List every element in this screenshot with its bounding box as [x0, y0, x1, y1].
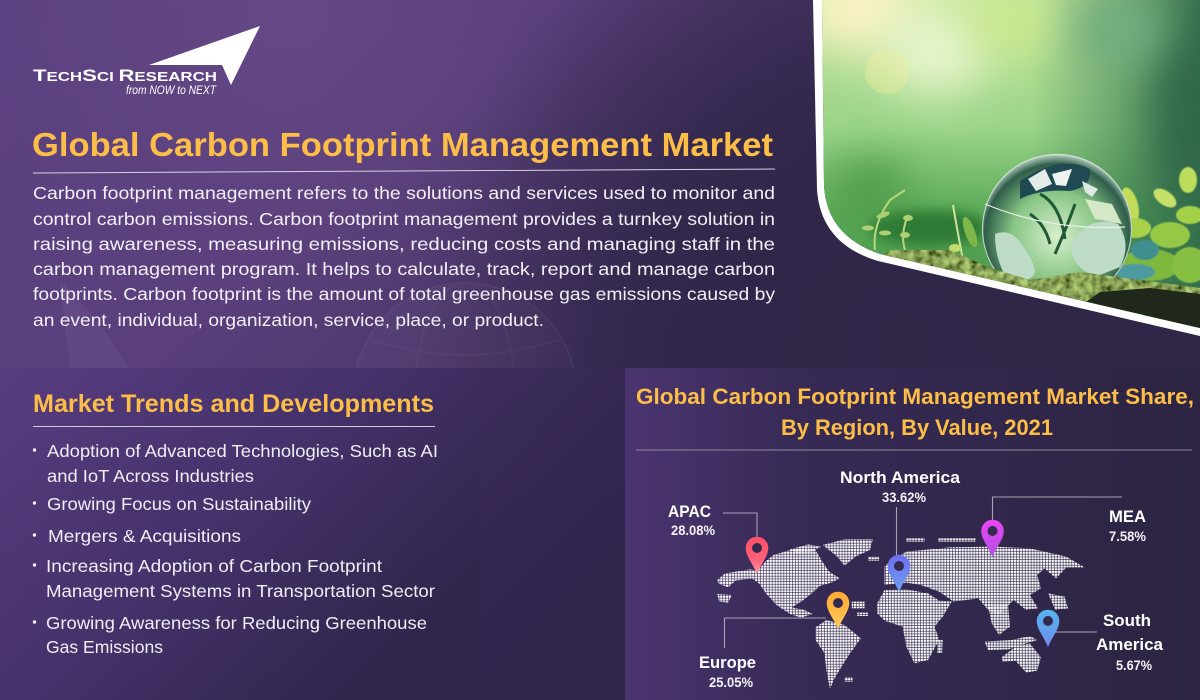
description text: Carbon footprint management refers to the solutions and services used to monitor and: [33, 183, 775, 203]
label: APAC: 28.08%: [671, 523, 715, 538]
small ferns left: [874, 189, 964, 256]
label: South America: America: [1096, 635, 1164, 654]
description text: an event, individual, organization, service, place, or product.: [33, 310, 544, 330]
pin: South America: [1037, 610, 1059, 647]
description text: [33, 183, 775, 330]
label: MEA: [1109, 507, 1146, 544]
ground moss: [884, 250, 1200, 328]
pin: APAC: [746, 537, 768, 574]
label: MEA: MEA: [1109, 507, 1146, 526]
pin: MEA: [981, 520, 1004, 557]
label: North America: 33.62%: [882, 490, 926, 505]
photo: glass globe on moss: [800, 0, 1200, 340]
panel: market trends: [0, 368, 625, 700]
description text: raising awareness, measuring emissions, reducing costs and managing staff in the: [33, 234, 775, 254]
label: Europe: [699, 653, 756, 690]
label: South America: [1096, 611, 1164, 673]
icon: paper plane: [149, 26, 260, 85]
bullet list: [33, 441, 438, 657]
bullet list: Mergers & Acquisitions: [48, 526, 241, 546]
description text: control carbon emissions. Carbon footprint management provides a turnkey solution in: [33, 209, 775, 229]
label: South America: South: [1103, 611, 1151, 630]
logo: TECH S CI R ESEARCH: [33, 66, 217, 85]
heading: market share: Global Carbon Footprint Management Market Share,: [636, 384, 1194, 409]
dotted world map: [717, 538, 1084, 689]
heading: market trends: Market Trends and Developments: [33, 390, 434, 418]
bullet list: Growing Awareness for Reducing Greenhouse: [46, 613, 427, 633]
heading: market share: By Region, By Value, 2021: [781, 415, 1053, 440]
logo: from NOW to NEXT: [126, 85, 217, 97]
ferns right: [1115, 167, 1200, 283]
panel: market share map: [625, 368, 1200, 700]
faint background globe and fern: [60, 280, 577, 507]
description text: footprints. Carbon footprint is the amount of total greenhouse gas emissions caused by: [33, 284, 775, 304]
bullet list: and IoT Across Industries: [47, 466, 254, 486]
logo: [33, 26, 260, 97]
title: Global Carbon Footprint Management Market: [32, 126, 773, 163]
pin: North America: [888, 555, 910, 592]
bullet list: Gas Emissions: [46, 637, 163, 657]
bullet list: Management Systems in Transportation Sector: [46, 581, 435, 601]
label: South America: 5.67%: [1116, 658, 1152, 673]
label: North America: North America: [840, 468, 961, 487]
label: APAC: [668, 502, 715, 538]
glass globe: [982, 154, 1132, 304]
pin: Europe: [827, 592, 849, 629]
label: North America: [840, 468, 961, 505]
label: MEA: 7.58%: [1109, 529, 1146, 544]
label: APAC: APAC: [668, 502, 711, 521]
heading: market share: [636, 384, 1194, 440]
leader lines: [723, 497, 1122, 648]
bullet list: Growing Focus on Sustainability: [47, 494, 311, 514]
label: Europe: 25.05%: [709, 675, 753, 690]
bullet list: Adoption of Advanced Technologies, Such as AI: [47, 441, 438, 461]
label: Europe: Europe: [699, 653, 756, 672]
description text: carbon management program. It helps to calculate, track, report and manage carbon: [33, 259, 775, 279]
bullet list: Increasing Adoption of Carbon Footprint: [46, 556, 382, 576]
